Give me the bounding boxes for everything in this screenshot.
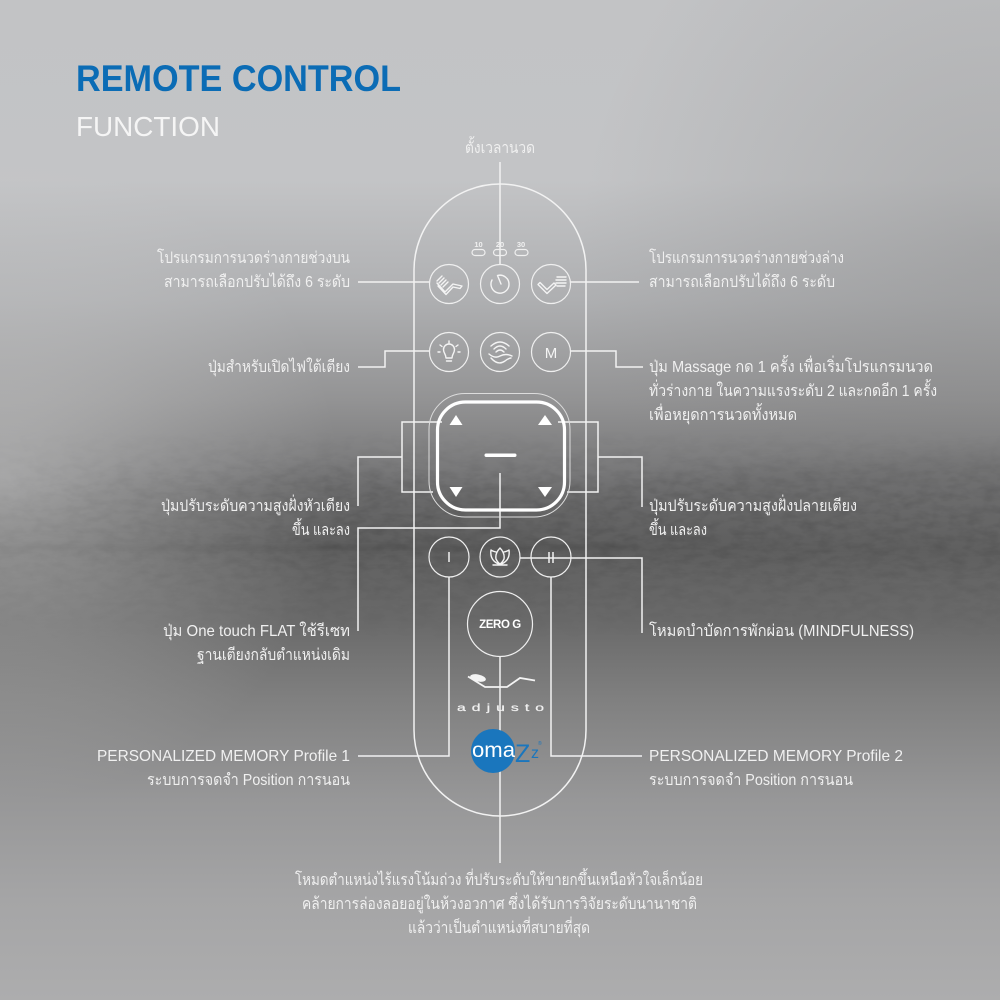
label: mindfulness: โหมดบำบัดการพักผ่อน (MINDFULNESS) [649,621,914,640]
zero g callout line [499,656,501,863]
button: timer [480,264,520,304]
label: zero g description: แล้วว่าเป็นตำแหน่งที่สบายที่สุด [408,916,590,938]
adjusto logo [457,673,544,713]
lower body callout line [570,281,639,283]
label: massage button: เพื่อหยุดการนวดทั้งหมด [649,403,797,425]
timer presets [472,240,528,256]
timer presets: 20 [496,240,504,249]
omazz logo [471,729,542,773]
button: memory 1 [429,537,469,577]
label: one touch flat: ฐานเตียงกลับตำแหน่งเดิม [197,646,350,664]
label: memory profile 2 [649,748,903,789]
remote control diagram [358,162,643,863]
button: bed light [430,332,468,372]
memory 1 callout line [358,577,449,756]
button: lower body massage [532,264,570,304]
label: upper body program [157,248,350,291]
label: massage button: ทั่วร่างกาย ในความแรงระดับ 2 และกดอีก 1 ครั้ง [649,379,937,400]
label: memory profile 1: ระบบการจดจำ Position การนอน [147,772,350,789]
adjusto logo: adjusto [457,702,544,713]
memory 2 callout line [551,577,642,756]
label: upper body program: โปรแกรมการนวดร่างกายช่วงบน [157,248,350,267]
massage callout line [570,351,643,367]
label: zero g description: โหมดตำแหน่งไร้แรงโน้มถ่วง ที่ปรับระดับให้ขายกขึ้นเหนือหัวใจเล็กน้อย [295,868,703,889]
upper body callout line [358,281,430,283]
label: memory profile 2: PERSONALIZED MEMORY Profile 2 [649,748,903,765]
label: lower body program [649,248,844,291]
button: massage waves [480,332,520,372]
label: upper body program: สามารถเลือกปรับได้ถึง 6 ระดับ [164,272,350,291]
button: M [532,332,570,372]
button: zero g [468,592,532,656]
remote body outline [414,184,586,816]
title: REMOTE CONTROL [76,58,401,99]
button: mindfulness lotus [480,537,520,577]
label: head adjust [161,494,350,539]
label: timer: ตั้งเวลานวด [465,136,535,157]
omazz logo: ® [538,740,542,747]
timer presets: 30 [517,240,525,249]
timer presets: 10 [474,240,483,249]
flat callout line [358,473,500,631]
omazz logo: Z [515,740,530,768]
omazz logo: z [531,745,539,762]
label: massage button [649,355,937,425]
head adjust callout line [358,422,442,506]
label: memory profile 2: ระบบการจดจำ Position การนอน [649,772,853,789]
label: bed light: ปุ่มสำหรับเปิดไฟใต้เตียง [208,357,350,377]
foot adjust callout line [558,422,642,507]
label: memory profile 1 [97,748,350,789]
label: lower body program: สามารถเลือกปรับได้ถึง 6 ระดับ [649,272,835,291]
light callout line [358,351,430,367]
button: M: M [545,345,557,362]
omazz logo: oma [472,739,515,762]
label: foot adjust: ปุ่มปรับระดับความสูงฝั่งปลายเตียง [649,494,857,516]
adjustment pad [429,394,570,517]
label: head adjust: ขึ้น และลง [292,518,350,539]
label: zero g description: คล้ายการล่องลอยอยู่ในห้วงอวกาศ ซึ่งได้รับการวิจัยระดับนานาชาติ [302,892,697,914]
button: upper body massage [430,264,468,304]
button: zero g: ZERO G [479,619,521,631]
label: foot adjust [649,494,857,539]
label: one touch flat [163,621,350,664]
label: massage button: ปุ่ม Massage กด 1 ครั้ง เพื่อเริ่มโปรแกรมนวด [649,355,933,377]
subtitle: FUNCTION [76,111,220,142]
label: foot adjust: ขึ้น และลง [649,518,707,539]
label: head adjust: ปุ่มปรับระดับความสูงฝั่งหัวเตียง [161,494,350,516]
label: one touch flat: ปุ่ม One touch FLAT ใช้รีเซท [163,621,350,641]
button: memory 2 [531,537,571,577]
timer callout line [499,162,501,265]
mindfulness callout line [520,558,642,633]
label: memory profile 1: PERSONALIZED MEMORY Profile 1 [97,748,350,765]
label: lower body program: โปรแกรมการนวดร่างกายช่วงล่าง [649,248,844,267]
label: zero g description [295,868,703,938]
